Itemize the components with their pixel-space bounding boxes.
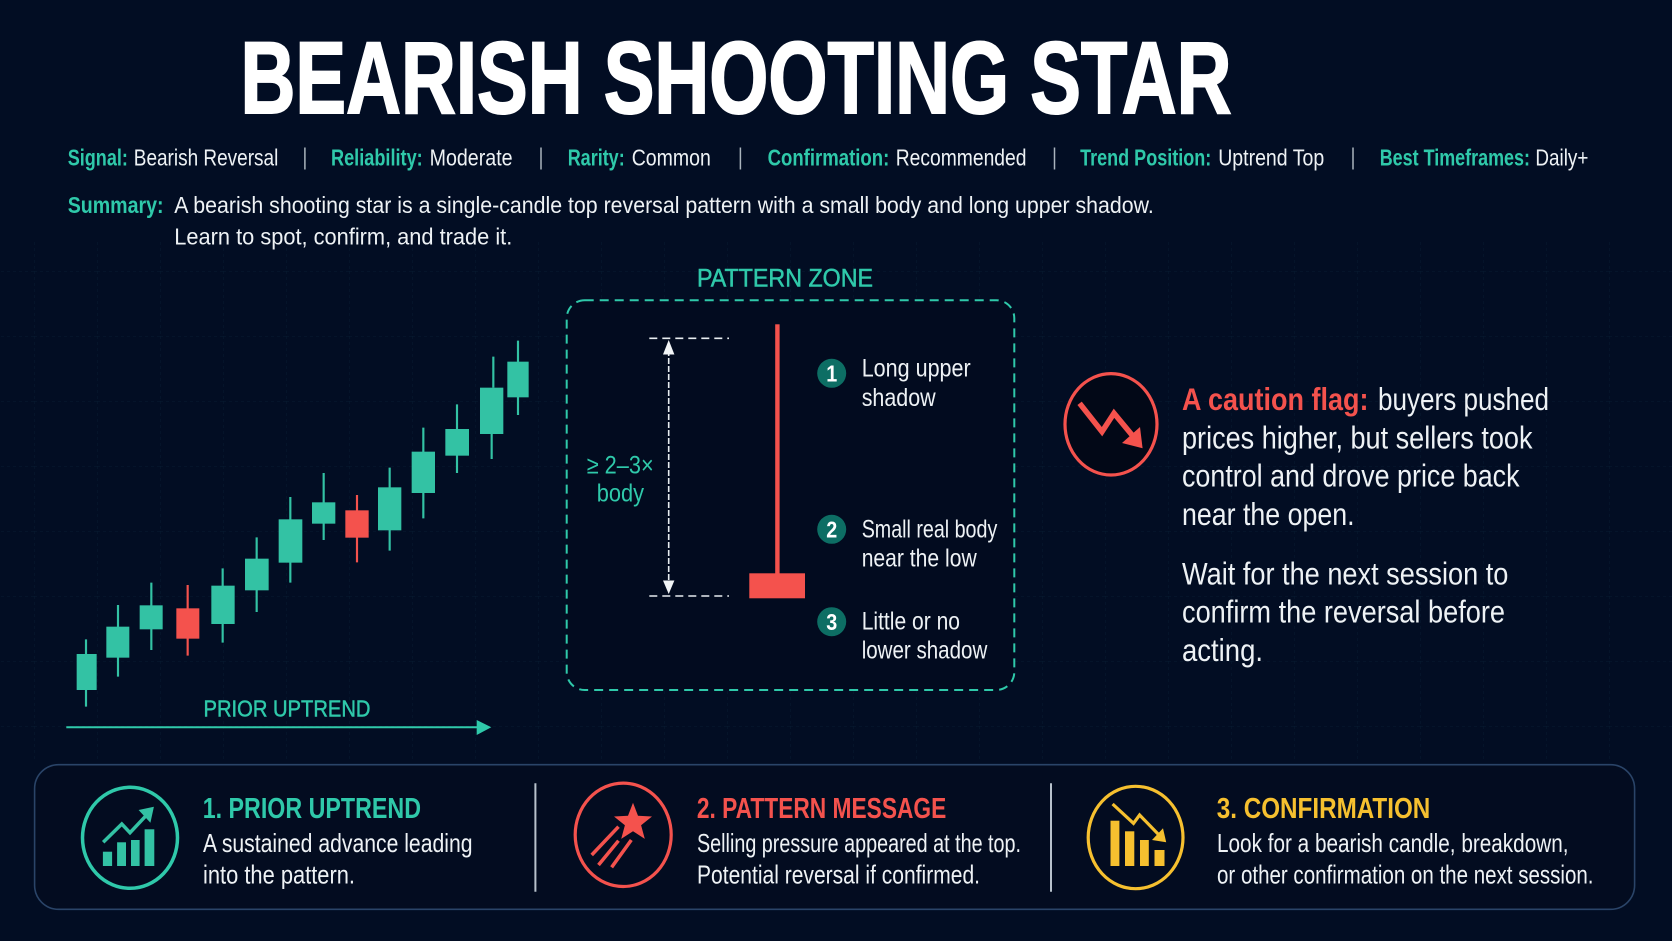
reliability [331,145,513,171]
metadata row [68,145,1588,171]
wait text: Wait for the next session to [1182,555,1508,591]
rarity [568,145,711,171]
measurement label: ≥ 2–3× [587,452,654,480]
caution text: near the open. [1182,496,1354,532]
pattern zone heading: PATTERN ZONE [697,265,873,293]
caution callout [1065,374,1549,668]
rarity: Common [632,145,711,171]
summary: Learn to spot, confirm, and trade it. [174,224,512,250]
icon: rising chart [82,787,178,888]
caution text: buyers pushed [1378,381,1549,417]
callout 1: long upper shadow: shadow [862,384,937,412]
callout 1: long upper shadow: Long upper [862,355,971,383]
confirmation [768,145,1026,171]
signal: Signal: [68,145,128,171]
step 1: prior uptrend [82,787,472,889]
step 2 text: Potential reversal if confirmed. [697,859,980,889]
step 2 text: Selling pressure appeared at the top. [697,828,1021,858]
pattern zone dashed frame [567,300,1014,690]
best timeframes: Best Timeframes: [1380,145,1530,171]
callout 1: long upper shadow: 1 [826,360,837,386]
wait text: acting. [1182,632,1263,668]
step 2 text: 2. PATTERN MESSAGE [697,793,946,825]
step 1 text [203,793,472,889]
icon: shooting star [575,783,671,886]
icon: falling chart [1088,786,1183,889]
measurement label: body [597,480,644,508]
callout 2: small real body [817,515,998,573]
summary [68,192,1154,250]
signal: Bearish Reversal [134,145,278,171]
prior uptrend arrow [66,720,491,735]
trend position [1080,145,1324,171]
reliability: Moderate [430,145,513,171]
prior uptrend label: PRIOR UPTREND [204,696,370,722]
step 1 text: into the pattern. [203,859,355,889]
bottom panel [35,765,1635,909]
summary: A bearish shooting star is a single-candle top reversal pattern with a small body and long upper shadow. [174,192,1154,218]
signal [68,145,278,171]
pattern zone [567,265,1014,690]
step 3 text: Look for a bearish candle, breakdown, [1217,828,1568,858]
callout 3: little lower shadow: lower shadow [862,636,988,664]
caution text: prices higher, but sellers took [1182,419,1533,455]
callout 1: long upper shadow [817,355,971,412]
wait text [1182,555,1508,668]
callout 2: small real body: Small real body [862,515,998,543]
best timeframes: Daily+ [1535,145,1588,171]
caution text [1182,381,1549,532]
rarity: Rarity: [568,145,625,171]
step 2: pattern message [575,783,1021,889]
confirmation: Recommended [896,145,1026,171]
icon: falling arrow [1065,374,1157,475]
wait text: confirm the reversal before [1182,594,1505,630]
measurement label [587,452,654,508]
callout 2: small real body: 2 [826,516,837,542]
callout 3: little lower shadow [817,607,988,664]
step 3: confirmation [1088,786,1594,889]
callout 3: little lower shadow: 3 [826,609,837,635]
step 2 text [697,793,1021,889]
panel frame [35,765,1635,909]
callout 2: small real body: near the low [862,545,977,573]
reliability: Reliability: [331,145,423,171]
summary: Summary: [68,192,164,218]
step 1 text: A sustained advance leading [203,828,472,858]
confirmation: Confirmation: [768,145,889,171]
caution text: A caution flag: [1182,381,1368,417]
title: BEARISH SHOOTING STAR [240,21,1232,135]
measurement: shadow length [649,338,729,596]
callout 3: little lower shadow: Little or no [862,607,960,635]
step 3 text: 3. CONFIRMATION [1217,793,1430,825]
caution text: control and drove price back [1182,458,1520,494]
step 1 text: 1. PRIOR UPTREND [203,793,421,825]
candlestick chart: prior uptrend [66,341,529,735]
shooting star candle [749,324,805,598]
step 3 text [1217,793,1594,889]
trend position: Trend Position: [1080,145,1211,171]
trend position: Uptrend Top [1218,145,1324,171]
candles [77,341,529,707]
